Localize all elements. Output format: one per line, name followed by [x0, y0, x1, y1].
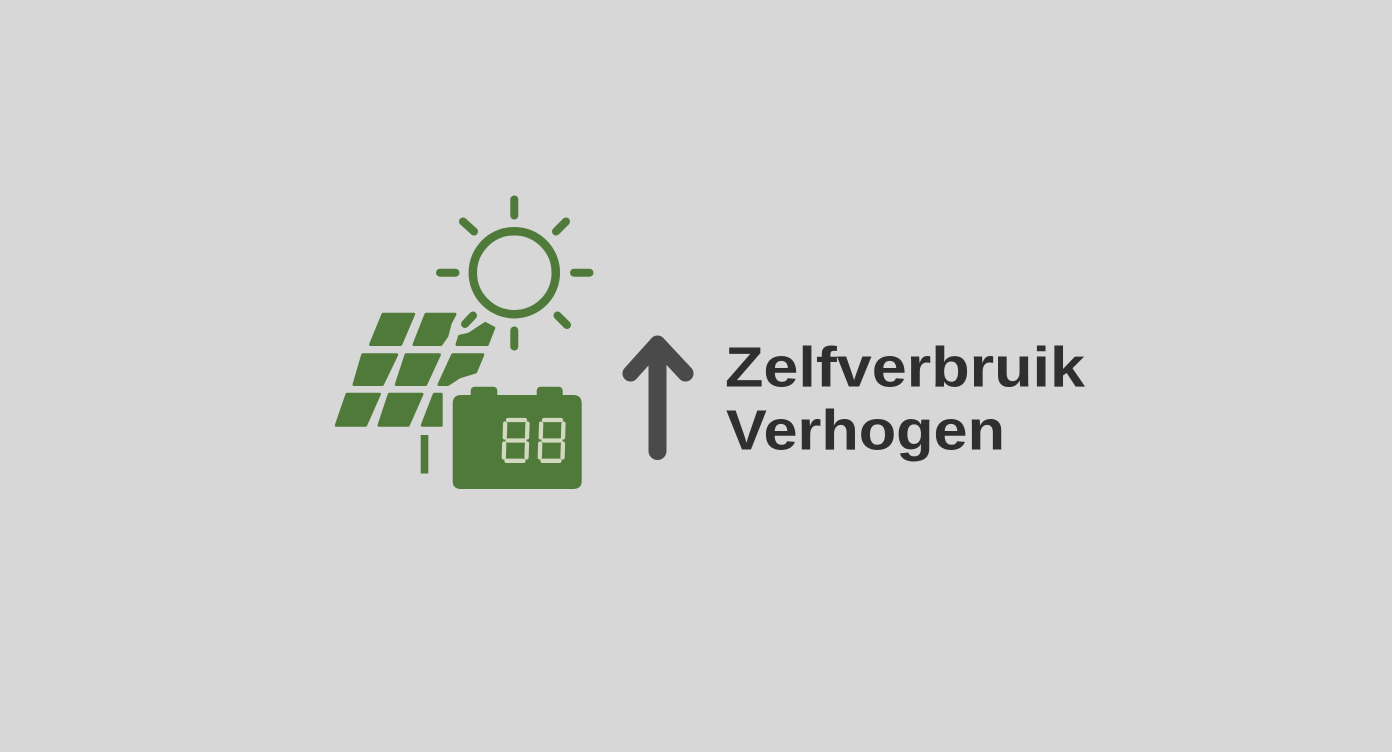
solar panel post — [421, 435, 428, 474]
arrow: increase — [630, 344, 686, 451]
icon: sun — [440, 200, 590, 346]
title: Zelfverbruik — [725, 336, 1085, 400]
battery digits — [504, 420, 564, 461]
title: Verhogen — [726, 398, 1005, 462]
title — [725, 336, 1085, 462]
icon: solar panel — [336, 314, 494, 425]
icon: battery — [453, 387, 582, 489]
